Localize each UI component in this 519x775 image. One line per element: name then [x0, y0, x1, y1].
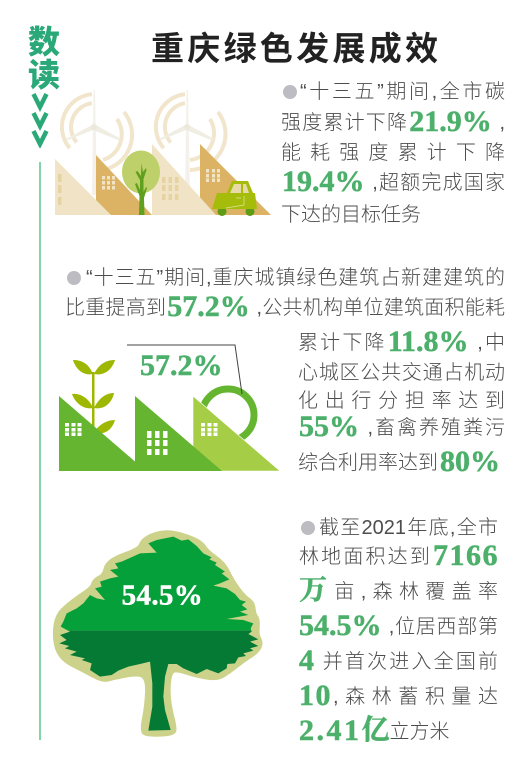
text block: carbon intensity: 能耗强度累计下降: [281, 142, 505, 164]
icon: chevrons: [32, 93, 48, 148]
text block: forest coverage: 林地面积达到7166: [299, 539, 499, 572]
bullet: [67, 271, 81, 285]
illustration: wind turbines, buildings, tree and car: [55, 90, 271, 216]
wind turbine one: [62, 90, 132, 195]
leader line: [127, 345, 242, 394]
illustration: tree with 54.5%: [52, 530, 262, 737]
text block: green buildings: 化出行分担率达到: [298, 390, 505, 412]
text block: forest coverage: 54.5% ,位居西部第: [299, 609, 498, 642]
cream building windows: [58, 174, 178, 205]
text block: forest coverage: 万亩,森林覆盖率: [299, 575, 498, 606]
building: tan rear right: [200, 144, 271, 215]
vertical label: 数读: [28, 17, 60, 96]
vertical label: 数读: 数: [28, 17, 60, 63]
text block: green buildings: “十三五”期间,重庆城镇绿色建筑占新建建筑的: [86, 267, 505, 289]
tree: round green crown: [122, 150, 160, 215]
text block: forest coverage: 10,森林蓄积量达: [299, 679, 498, 712]
bullet: [301, 521, 315, 535]
ring chart: [202, 389, 254, 441]
text block: green buildings: 综合利用率达到80%: [298, 445, 500, 478]
tree outline: [56, 533, 260, 734]
text block: green buildings: 心城区公共交通占机动: [298, 362, 505, 384]
value: 54.5%: 54.5%: [122, 579, 203, 611]
wind turbine two: [156, 90, 226, 195]
bullet: [283, 85, 297, 99]
text block: green buildings: [65, 267, 505, 478]
illustration: green buildings with 57.2% ring: [59, 344, 280, 471]
text block: green buildings: 55% ,畜禽养殖粪污: [299, 410, 505, 443]
vertical rule: [39, 162, 41, 740]
text block: forest coverage: 截至2021年底,全市: [319, 517, 498, 539]
icon: green car: [212, 181, 257, 216]
text block: forest coverage: 2.41亿立方米: [299, 714, 450, 747]
text block: green buildings: 比重提高到57.2% ,公共机构单位建筑面积能耗: [65, 290, 505, 323]
building windows: [102, 169, 220, 190]
text block: forest coverage: [299, 517, 499, 747]
dark building middle: [135, 396, 222, 471]
building: tan rear left: [96, 155, 152, 215]
text block: carbon intensity: 19.4% ,超额完成国家: [282, 165, 505, 198]
light building: [193, 396, 280, 471]
building: cream right: [152, 144, 216, 215]
dark building left: [59, 396, 146, 471]
title: 重庆绿色发展成效: [151, 22, 441, 70]
text block: carbon intensity: 下达的目标任务: [281, 204, 421, 226]
windows: [65, 423, 218, 455]
tree upper crown: [60, 536, 254, 631]
building: cream left: [55, 159, 111, 215]
text block: carbon intensity: 强度累计下降21.9% ,: [281, 105, 505, 138]
text block: forest coverage: 4 并首次进入全国前: [299, 644, 498, 677]
tree lower crown and trunk: [60, 630, 258, 731]
vertical label: 数读: 读: [28, 50, 60, 96]
text block: green buildings: 累计下降11.8% ,中: [298, 325, 505, 358]
value: 57.2%: 57.2%: [140, 349, 222, 382]
text block: carbon intensity: [281, 81, 505, 226]
text block: carbon intensity: “十三五”期间,全市碳: [300, 81, 505, 103]
plant: [72, 360, 115, 434]
